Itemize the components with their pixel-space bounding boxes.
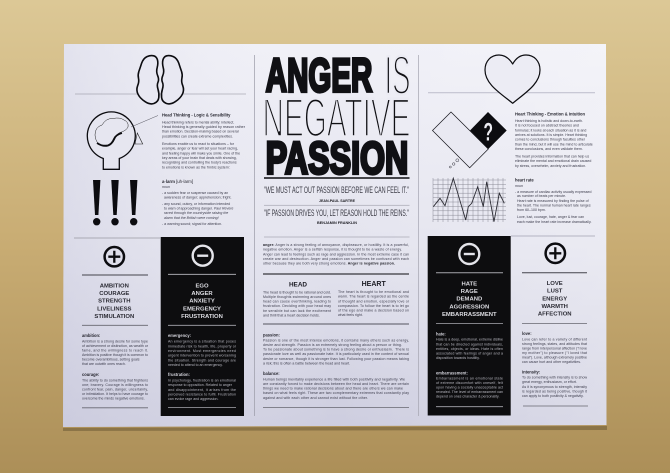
word list: ego: ANXIETY [189,299,215,305]
definition: love: Love can refer to a variety of different [522,338,587,342]
text block: heart thinking: formulas; it looks at each situation as it is and [515,128,586,132]
panel: centre text [263,243,410,408]
definition: heart rate: the heart. The normal human heart rate ranges [517,204,591,208]
text block: head: frustration. Deciding with your head may [263,304,331,308]
icon: plus [105,247,124,266]
heading: head thinking: Head Thinking - Logic & Sensibility [162,112,231,118]
definition: passion: passion: [263,332,280,338]
definition: balance: are constantly forced to make decisions between the head and heart. There are certain [263,382,409,386]
definition: embarrassment: depend on ones character & personality. [436,395,499,399]
text block: head: and thrill that a heart decision holds. [263,313,320,317]
word list: love: WARMTH [541,304,568,310]
word list: hate [442,281,497,318]
definition: balance: balance: [263,371,280,376]
definition: embarrassment: revealed. The level of embarrassment can [436,390,503,394]
definition: intensity: great energy, enthusiasm, or effort. [522,380,577,384]
word list: ambition: STIMULATION [94,314,134,320]
text block: head thinking [162,120,246,169]
icon: brain [137,56,184,104]
definition: passion: a risk; this is often a battle between the head and heart. [263,361,350,365]
definition: frustration: response to opposition. Related to anger [168,383,233,387]
definition: alarm: alarm that the British were coming! [164,216,219,220]
text block: heart thinking: eliminate the mental and emotional drain caused [515,159,591,163]
text block: head thinking: recognising and controlling the body's reactions [162,161,237,165]
definition: balance: things we need to make rational decisions about and there are others we can make [263,387,403,391]
definition: love: my mother") to pleasure ("I loved that [522,351,587,355]
word list: ambition: COURAGE [99,291,129,297]
panel: positive heart traits [522,244,588,406]
definition: frustration: perceived resistance to fulfil. Frustration [168,392,236,396]
text block: head: Multiple thoughts swimming around ones [263,295,331,299]
definition: love: strong feelings, states, and attitudes that [522,342,587,346]
definition: anger: other because they are both very strong emotions. Anger is negative passion. [263,262,395,266]
text block: heart: of thought and emotion, especially love or [338,299,410,303]
word list: hate: EMBARRASSMENT [442,312,497,318]
definition: heart rate: - a measure of cardiac activity usually expressed [515,190,592,194]
panel: negative heart traits [428,236,511,416]
word list: ambition: AMBITION [100,283,129,289]
panel: negative head traits [161,237,244,416]
word list: ego: EMERGENCY [183,306,221,312]
word list: hate: AGGRESSION [449,304,489,310]
definition: embarrassment: of extreme discomfort with oneself, felt [436,381,503,385]
definition: ambition: ambition: [82,333,100,338]
definition: hate: hate: [436,332,446,336]
word list: ego: ANGER [191,291,213,297]
definition: hate: entities, objects, or ideas. Hate is often [436,347,503,351]
panel: head column [74,56,246,238]
definition: passion [263,332,409,365]
title: anger is negative passion [262,45,410,183]
text block: head thinking: example, anger or fear will set your heart racing, [162,147,238,151]
definition: love: can cause hurt and other negativities. [522,360,581,364]
definition: anger: create war and destruction. Anger and passion can sometimes be confused with each [263,257,409,261]
word list: hate: HATE [461,281,477,287]
quote: franklin [264,208,409,225]
definition: courage: one; bravery. Courage is willingness to [82,383,148,387]
definition: passion: desire and strength. Passion is an extremely strong feeling about a person or thing. [263,343,402,347]
text block: head: The head is thought to be rational and cold. [263,290,331,294]
definition: passion: Passion is one of the most intense emotions, it contains many others such as energy, [263,339,409,343]
definition: intensity: intensity: [522,370,540,374]
definition: embarrassment: Embarrassment is an emotional state [436,376,503,380]
word list: ego: EGO [195,283,209,289]
definition: alarm [162,179,233,226]
definition: frustration: In psychology, frustration is an emotional [168,378,236,382]
definition: balance: against and with each other and cannot exist without the other. [263,396,368,400]
definition: ambition: of achievement or distinction, as wealth or [82,344,149,348]
quote: franklin: "IF PASSION DRIVES YOU, LET REASON HOLD THE REINS." [264,208,409,218]
title: anger is negative passion: ANGER [266,49,372,102]
heading: head: HEAD [289,281,307,288]
definition: courage: overcome the minds negative emotions. [82,396,145,400]
definition: embarrassment: embarrassment: [436,370,468,376]
quote: sartre: JEAN-PAUL SARTRE [319,198,355,203]
word list: love: AFFECTION [538,312,572,318]
definition: emergency [168,333,237,367]
word list: ego: FRUSTRATION [181,314,223,320]
text block: head: be sensible but can lack the excitement [263,309,331,313]
definition: passion: desire or romance, though it is stronger than lust. Following your passion means taking [263,357,409,361]
title: anger is negative passion: IS [384,45,410,106]
definition: passion: passionate love as well as passionate hate. It is particularly used in the context of sexual [263,352,409,356]
definition: ambition [82,333,149,366]
definition: alarm: to warn of approaching danger. Paul Revere [164,207,233,211]
word list: ego [181,283,223,320]
icon: three exclamation marks [93,180,137,225]
icon: minus [459,244,479,264]
definition: emergency: immediate risk to health, life, property or [168,344,237,348]
definition: balance: Human beings inevitably experience a life filled with both positivity and negativity. We [263,378,405,382]
quote: franklin: BENJAMIN FRANKLIN [317,220,357,225]
icon: diamond heart with question mark: ? [484,118,493,146]
text block: head [263,290,331,317]
definition: alarm: awareness of danger; apprehension; fright. [164,196,231,200]
text block: head thinking: Emotions enable us to react to situations – for [162,142,235,146]
definition: alarm: - a sudden fear or suspense caused by an [162,191,228,195]
definition: ambition: fame, and the willingness to reach it. [82,349,148,353]
definition: heart rate: as number of beats per minute. [517,194,566,198]
icon: diamond heart with question mark [432,112,507,168]
text block: heart thinking: arrives at solutions. It is simple. Heart thinking [515,133,587,137]
word list: ambition: LIVELINESS [97,306,132,312]
title: anger is negative passion: NEGATIVE [262,88,410,148]
text block: heart thinking: comes to conclusions through faculties other [515,138,586,142]
panel: centre title [262,45,410,237]
word list: hate: DEMAND [456,297,482,303]
word list: love: LOVE [547,281,563,287]
definition: alarm: a·larm [uh-larm] [162,179,193,184]
definition: courage [82,372,148,400]
definition: love: range from interpersonal affection ("I love [522,346,587,350]
definition: emergency: emergency: [168,333,191,338]
text block: heart: compassion. To follow the heart is to let go [338,304,409,308]
definition: alarm: noun [162,185,170,189]
icon: heart [485,55,540,103]
definition: emergency: needed to attend to an emergency. [168,363,223,367]
definition: intensity: can apply to both positivity & negativity. [522,394,584,398]
word list: love: LUST [547,289,563,295]
text block: heart: warm. The heart is regarded as the centre [338,295,409,299]
definition: anger: anger: Anger is a strong feeling of annoyance, displeasure, or hostility. It is a powerful, [263,243,409,247]
definition: love [522,331,587,364]
text block: heart: of the ego and make a decision based on [338,308,409,312]
definition: emergency: An emergency is a situation that poses [168,340,236,344]
definition: intensity: is regarded as being positive, though it [522,389,587,393]
text block: heart thinking: these conclusions, and even validate them. [515,147,583,151]
definition: frustration: and disappointment, it arises from the [168,388,236,392]
text block: heart thinking: than the mind, but it will use the mind to articulate [515,142,593,146]
definition: anger: negative emotion. Anger is a selfish response, it is thought to be a waste of energy. [263,248,402,252]
definition: heart rate: from 60–100 bpm. [517,208,546,212]
word list: ambition [94,283,134,320]
text block: heart thinking: It is not focused on abstract theories and [515,124,579,128]
definition: intensity [522,370,587,398]
text block: head thinking: to emotions is known as the 'limbic system'. [162,165,230,169]
text block: heart thinking [515,119,593,168]
icon: plus [546,244,565,263]
definition: courage: courage: [82,372,99,377]
chart: heart rate grid [433,178,506,222]
heading: heart: HEART [362,281,386,288]
definition: hate [436,332,503,360]
text block: heart: what feels right. [338,313,363,317]
definition: anger: Anger can lead to feelings such as rage and aggression. In the most extreme case it can [263,252,409,256]
definition: embarrassment [436,370,503,399]
definition: ambition: Ambition is positive though it is common to [82,353,148,357]
definition: alarm: - any sound, outcry, or information intended [162,202,230,206]
panel: positive head traits [82,247,149,408]
poster sheet [63,44,606,427]
text block: head: head can cause overthinking, leading to [263,300,331,304]
definition: ambition: that are outwith ones reach. [82,362,126,366]
quote: sartre: "WE MUST ACT OUT PASSION BEFORE WE CAN FEEL IT." [264,185,409,195]
quote: sartre [264,185,409,203]
word list: love: ENERGY [542,296,567,302]
definition: ambition: become overambitious, setting goals [82,357,140,361]
definition: balance: based on what feels right. These are two complementary extremes that constantly play [263,391,409,395]
definition: heart rate: each make the heart rate increase dramatically. [517,220,591,224]
definition: love: meal"). Love, although extremely positive [522,356,587,360]
text block: heart thinking: by stress, overwhelm, anxiety and frustration. [515,164,586,168]
word list: love [538,281,572,318]
title: anger is negative passion: PASSION [266,132,408,183]
definition: passion: To be passionate about something is to have a strong desire or enthusiasm. There is [263,348,409,352]
definition: heart rate [515,177,592,224]
text block: head thinking: than emotion. Decision-making based on several [162,130,239,134]
definition: hate: Hate is a deep, emotional, extreme dislike [436,338,503,342]
text block: heart thinking: The heart provides information that can help us [515,154,589,158]
text block: head thinking: possibilities can create extreme complexities. [162,134,233,138]
text block: heart [338,290,410,317]
definition: emergency: urgent intervention to prevent worsening [168,354,236,358]
definition: heart rate: Heart rate is measured by finding the pulse of [517,199,589,203]
definition: balance [263,371,409,400]
definition: frustration [168,372,236,401]
definition: intensity: As it is synonymous to strength, intensity [522,385,587,389]
text block: head thinking: and feeling happy will make you smile. One of the [162,151,240,155]
definition: intensity: To do something with intensity is to show [522,376,587,380]
text block: head thinking: Head thinking refers to mental ability: intellect. [162,120,234,124]
definition: hate: associated with feelings of anger and a [436,351,503,355]
definition: courage: or intimidation. It helps to have courage to [82,392,148,396]
icon: minus [193,246,213,266]
word list: hate: RAGE [461,289,478,295]
definition: frustration: can evoke rage and aggression. [168,397,218,401]
definition: anger [263,243,409,266]
definition: alarm: - a warning sound; signal for attention. [162,222,222,226]
text block: heart thinking: Heart thinking is holistic and down-to-earth. [515,119,583,123]
definition: heart rate: Love, lust, courage, hate, anger & fear can [517,215,584,219]
definition: ambition: Ambition is a strong desire for some type [82,340,148,344]
definition: hate: disposition towards hostility. [436,356,480,360]
definition: heart rate: noun [515,184,523,188]
definition: embarrassment: upon having a socially unacceptable act [436,386,503,390]
panel: heart column [428,55,595,236]
definition: heart rate: heart rate [515,177,534,182]
definition: emergency: the situation. Strength and courage are [168,358,236,362]
definition: love: love: [522,331,532,336]
definition: alarm: raced through the countryside raising the [164,211,228,215]
definition: emergency: environment. Most emergencies need [168,349,236,353]
definition: hate: that can be directed against individuals, [436,342,503,346]
heading: heart thinking: Heart Thinking - Emotion & Intuition [515,111,586,116]
definition: frustration: frustration: [168,372,190,377]
definition: courage: The ability to do something that frightens [82,378,148,382]
word list: ambition: STRENGTH [98,299,131,305]
definition: courage: confront fear, pain, danger, uncertainty, [82,388,148,392]
text block: head thinking: key areas of your brain that deals with showing, [162,156,237,160]
icon: head with brain [87,112,158,169]
text block: heart: The heart is thought to be emotional and [338,290,409,294]
text block: head thinking: Head thinking is generally guided by reason rather [162,125,246,129]
